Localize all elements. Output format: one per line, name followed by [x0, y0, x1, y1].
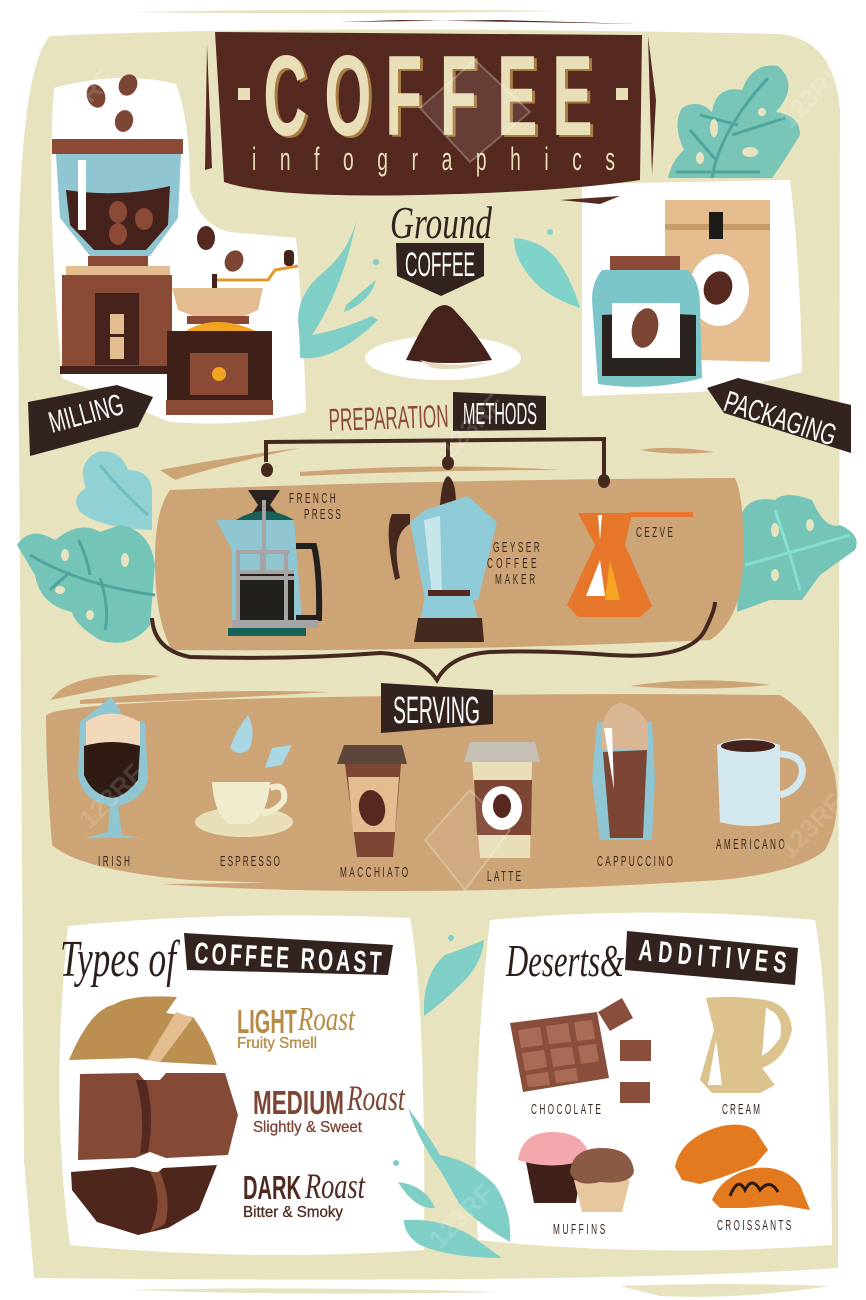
coffee grinder: electric: [52, 71, 183, 374]
label: geyser coffee maker: GEYSER: [493, 538, 540, 556]
text: light roast: Roast: [297, 1001, 356, 1038]
accent strokes: tan sweeps: [50, 448, 770, 891]
leaf: right: [737, 495, 857, 612]
text: light roast: Fruity Smell: [237, 1035, 317, 1052]
roast bean: dark: [71, 1165, 217, 1235]
label: cezve: CEZVE: [636, 523, 673, 541]
ground coffee pile on plate: [365, 305, 521, 380]
panel: preparation methods: [155, 478, 743, 650]
drink: espresso: ESPRESSO: [220, 852, 280, 870]
label: geyser coffee maker: MAKER: [495, 570, 535, 588]
panel: serving: [46, 694, 837, 885]
watermark marks: 123RF: [773, 58, 849, 134]
roast bean: medium crease: [136, 1080, 151, 1154]
leaf: between panels lower: [393, 1108, 510, 1258]
stem leaf: centre left: [298, 212, 379, 358]
roast bean: dark crease: [150, 1172, 168, 1232]
cezve: [567, 512, 693, 617]
heading: desserts and additives: [505, 931, 798, 986]
label: geyser coffee maker: COFFEE: [487, 554, 537, 572]
heading: preparation methods: METHODS: [463, 396, 537, 431]
ground coffee heading: Ground: [390, 197, 493, 248]
drink: cappuccino: CAPPUCCINO: [597, 852, 673, 870]
coffee bag: [665, 200, 770, 362]
text: dark roast: Roast: [304, 1166, 366, 1206]
text: medium roast: Roast: [346, 1078, 406, 1118]
heading: types of coffee roast: COFFEE ROAST: [194, 937, 383, 980]
dessert: chocolate: [510, 998, 651, 1118]
drink: americano: [716, 738, 802, 853]
dessert: chocolate: CHOCOLATE: [531, 1100, 601, 1118]
flying beans: [83, 71, 141, 134]
heading: desserts and additives: Deserts&: [505, 935, 624, 986]
heading: types of coffee roast: [60, 931, 393, 988]
text: medium roast: Slightly & Sweet: [253, 1119, 363, 1136]
label: french press: [289, 489, 341, 523]
drink: latte: LATTE: [487, 867, 521, 885]
watermark marks: 123RF: [73, 758, 149, 834]
drink: macchiato: MACCHIATO: [340, 863, 408, 881]
label: french press: PRESS: [304, 505, 341, 523]
watermark marks: 123RF: [773, 788, 849, 864]
text: dark roast: DARK: [243, 1169, 301, 1206]
additive: cream: [700, 997, 792, 1118]
title dots: [238, 88, 628, 100]
label: packaging: [707, 378, 851, 453]
leaf: top right oak: [668, 66, 800, 178]
drink: espresso: [195, 715, 293, 870]
leaf: left lower: [17, 525, 155, 643]
drink: irish: IRISH: [98, 852, 130, 870]
watermark marks: 123RF: [423, 1178, 499, 1254]
dessert: muffins: [518, 1132, 634, 1238]
dessert: croissants: [675, 1124, 810, 1234]
panel: coffee roast: [59, 915, 424, 1255]
additive: cream: CREAM: [722, 1100, 760, 1118]
label: serving: [381, 683, 493, 733]
drink: macchiato: [337, 745, 408, 881]
drink: cappuccino: [592, 703, 673, 870]
roast bean: medium: [78, 1073, 238, 1160]
text: medium roast: MEDIUM: [253, 1084, 344, 1121]
text: dark roast: [243, 1166, 366, 1221]
panel: desserts additives: [476, 912, 832, 1250]
watermark marks: 123RF: [433, 388, 509, 464]
subtitle: infographics: [252, 141, 615, 177]
drink: latte: [464, 742, 540, 885]
text: light roast: [237, 1001, 356, 1052]
dessert: croissants: CROISSANTS: [717, 1216, 791, 1234]
jar: [592, 256, 702, 387]
moka pot: [389, 476, 540, 642]
stem leaf: centre right: [514, 229, 580, 308]
connector: brace to serving: [152, 602, 715, 680]
heading: desserts and additives: ADDITIVES: [637, 934, 788, 980]
heading: preparation methods: PREPARATION: [328, 398, 449, 438]
label: geyser coffee maker: [487, 538, 540, 588]
roast bean: light: [69, 996, 217, 1065]
text: medium roast: [253, 1078, 406, 1136]
title COFFEE: COFFEE: [263, 33, 593, 160]
leaf: left upper: [76, 451, 152, 530]
label: serving: SERVING: [393, 690, 480, 732]
title shadow: COFFEE: [266, 35, 596, 162]
drink: irish: [78, 697, 148, 870]
label: milling: [28, 385, 153, 456]
label: french press: FRENCH: [289, 489, 336, 507]
ground coffee heading: [390, 197, 493, 296]
heading: types of coffee roast: Types of: [60, 931, 180, 988]
coffee grinder: manual: [166, 226, 298, 415]
panel: packaging white area: [582, 180, 802, 396]
roast bean: light crease: [147, 1012, 193, 1062]
drink: americano: AMERICANO: [716, 835, 785, 853]
french press: [216, 489, 341, 636]
text: light roast: LIGHT: [237, 1003, 297, 1040]
leaf: between panels upper: [424, 935, 484, 1016]
label: milling: MILLING: [45, 388, 127, 440]
panel: milling white area: [51, 78, 306, 424]
title banner: [205, 20, 656, 204]
watermark marks: 123RF: [43, 63, 119, 139]
text: dark roast: Bitter & Smoky: [243, 1204, 343, 1221]
ground coffee heading: COFFEE: [405, 246, 475, 284]
connector: method bracket: [261, 439, 610, 488]
dessert: muffins: MUFFINS: [553, 1220, 605, 1238]
